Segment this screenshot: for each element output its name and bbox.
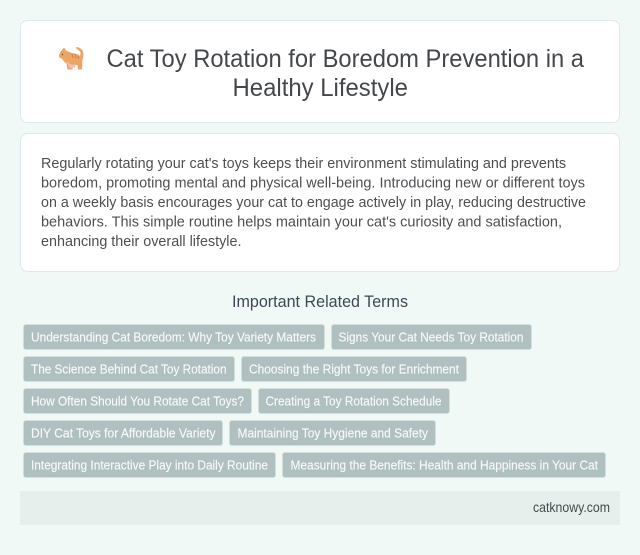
tag: choosing the right toys: Choosing the Right Toys for Enrichment xyxy=(249,362,459,376)
title line 2: Healthy Lifestyle xyxy=(232,74,408,102)
tag: signs your cat needs rotation: Signs Your Cat Needs Toy Rotation xyxy=(338,330,524,344)
tag: measuring benefits xyxy=(282,452,606,478)
panel: description card xyxy=(20,134,620,272)
icon: orange cat xyxy=(59,47,83,70)
title line 1: Cat Toy Rotation for Boredom Prevention in a xyxy=(106,45,584,73)
tag: interactive play: Integrating Interactive Play into Daily Routine xyxy=(31,458,268,472)
tag: rotation schedule: Creating a Toy Rotation Schedule xyxy=(266,394,442,408)
tag: choosing the right toys xyxy=(242,356,466,382)
description text block: behaviors. This simple routine helps maintain your cat's curiosity and satisfaction, xyxy=(41,214,562,230)
description text block: Regularly rotating your cat's toys keeps their environment stimulating and prevents xyxy=(41,155,566,172)
description text block: boredom, promoting mental and physical well-being. Introducing new or different toys xyxy=(41,174,585,192)
panel: title card xyxy=(20,20,620,122)
footer source text: catknowy.com xyxy=(533,499,610,515)
tag: interactive play xyxy=(24,452,276,478)
tag: understanding cat boredom: Understanding Cat Boredom: Why Toy Variety Matters xyxy=(31,330,316,344)
tag: measuring benefits: Measuring the Benefits: Health and Happiness in Your Cat xyxy=(290,458,598,472)
tag: diy toys xyxy=(24,420,222,446)
heading: important related terms: Important Related Terms xyxy=(232,293,408,311)
tag: diy toys: DIY Cat Toys for Affordable Variety xyxy=(31,426,216,440)
footer bar xyxy=(20,491,620,525)
panel: related term tags xyxy=(24,324,606,478)
tag: signs your cat needs rotation xyxy=(332,324,532,350)
tag: hygiene and safety xyxy=(230,420,436,446)
tag: understanding cat boredom xyxy=(24,324,324,350)
tag: the science: The Science Behind Cat Toy Rotation xyxy=(31,362,226,376)
tag: hygiene and safety: Maintaining Toy Hygiene and Safety xyxy=(238,426,428,440)
tag: the science xyxy=(24,356,234,382)
tag: how often xyxy=(24,388,252,414)
tag: how often: How Often Should You Rotate Cat Toys? xyxy=(31,394,244,408)
description text block: on a weekly basis encourages your cat to engage actively in play, reducing destructive xyxy=(41,194,586,211)
tag: rotation schedule xyxy=(258,388,450,414)
description text block: enhancing their overall lifestyle. xyxy=(41,233,242,250)
description text block xyxy=(41,155,586,250)
